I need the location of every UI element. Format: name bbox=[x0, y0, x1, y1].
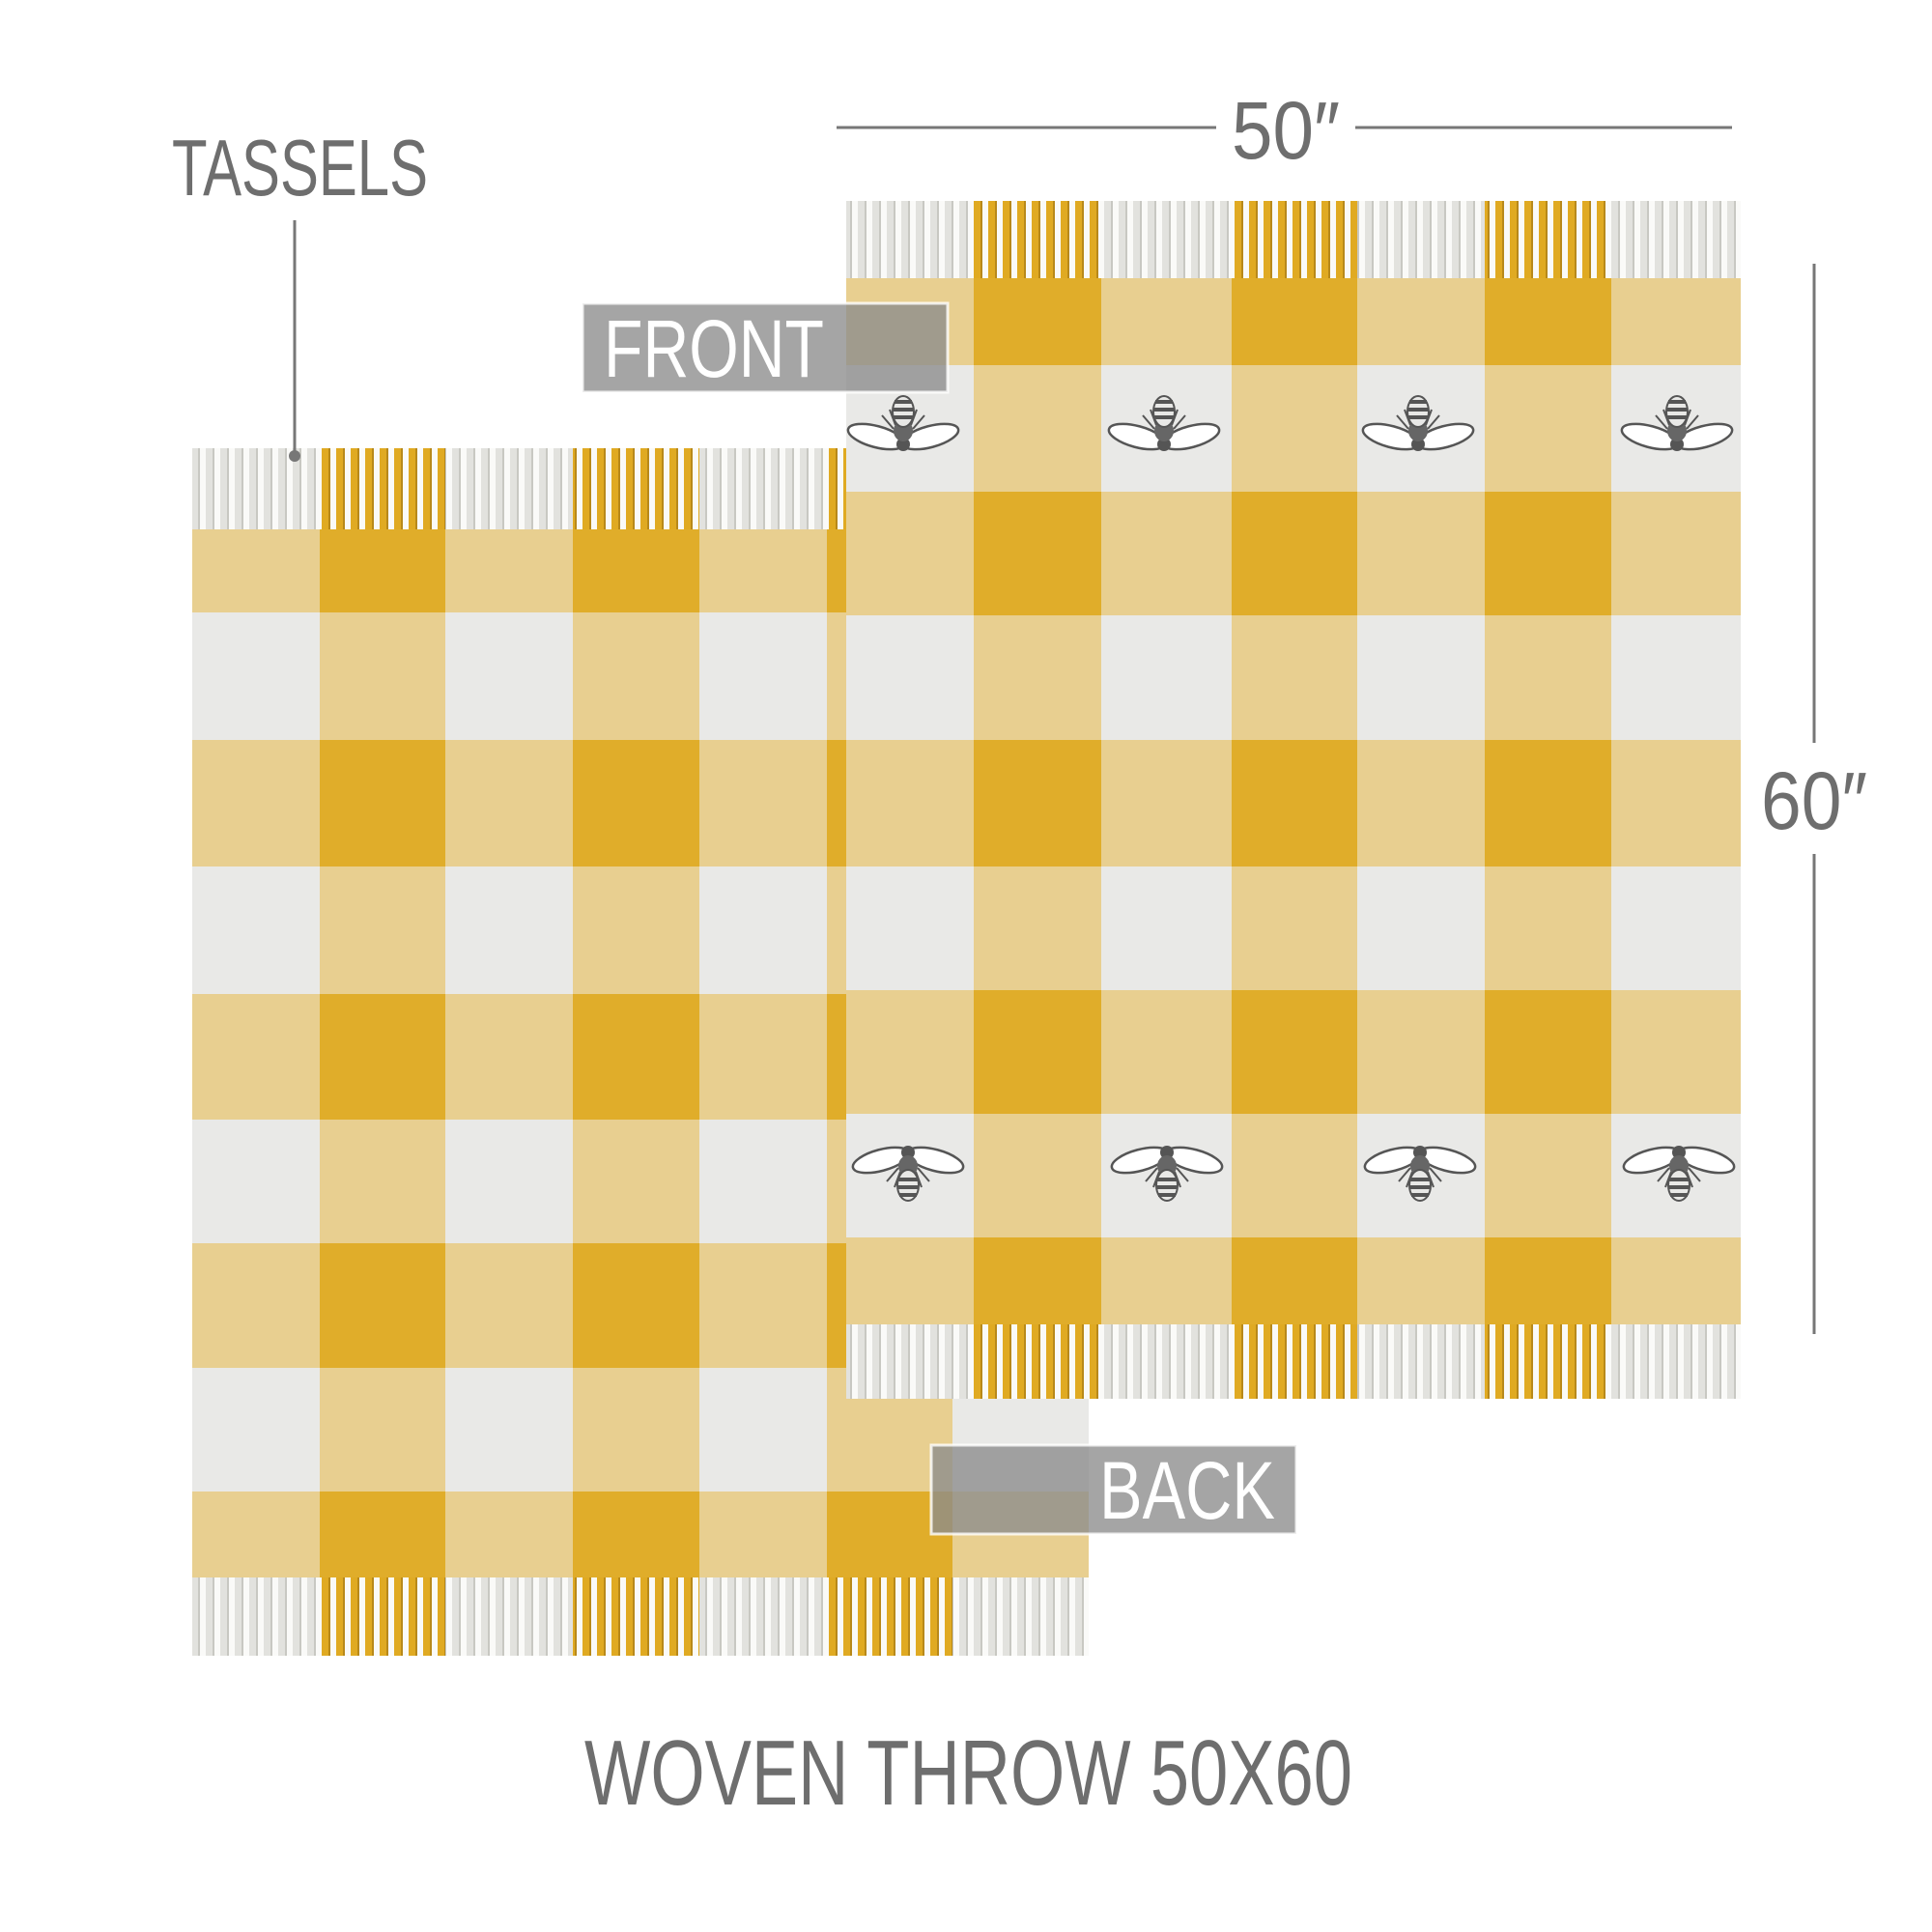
title: WOVEN THROW 50X60 bbox=[584, 1721, 1352, 1825]
dimension: height 60: 60″ bbox=[1761, 755, 1867, 846]
dimension: width 50: 50″ bbox=[1232, 85, 1340, 176]
icon: bees top row bbox=[845, 396, 1735, 454]
panel: back throw bbox=[192, 448, 1089, 1656]
label: front: FRONT bbox=[604, 303, 824, 394]
front bottom tassels bbox=[846, 1324, 1741, 1399]
label: tassels bbox=[172, 123, 428, 462]
front top tassels bbox=[846, 201, 1741, 278]
back body plaid bbox=[192, 529, 1089, 1577]
front body plaid bbox=[846, 278, 1741, 1324]
back bottom tassels bbox=[192, 1577, 1089, 1656]
panel: front throw bbox=[845, 201, 1741, 1399]
label: tassels: TASSELS bbox=[172, 123, 428, 213]
icon: bees bottom row bbox=[850, 1143, 1737, 1201]
back top tassels bbox=[192, 448, 846, 529]
tassels pointer line bbox=[289, 220, 300, 462]
label: back bbox=[931, 1445, 1296, 1536]
label: back: BACK bbox=[1099, 1445, 1275, 1536]
